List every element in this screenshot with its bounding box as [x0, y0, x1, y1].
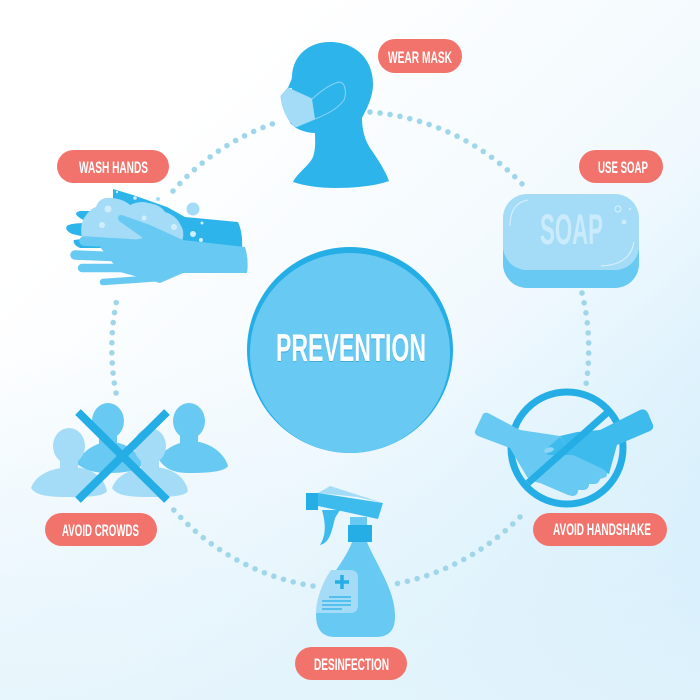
label: wear mask: WEAR MASK: [388, 48, 452, 67]
label: wash hands: [57, 150, 169, 183]
soap lettering: SOAP: [540, 206, 603, 254]
bubbles: [99, 191, 204, 242]
center circle: prevention: [247, 247, 453, 453]
icon: crowd crossed out: [31, 403, 228, 500]
thumb: [545, 437, 573, 455]
back right person: [158, 403, 228, 473]
label: desinfection: DESINFECTION: [314, 655, 389, 674]
label: wash hands: WASH HANDS: [79, 158, 148, 177]
icon: no handshake: [475, 392, 653, 504]
cross: [78, 412, 167, 500]
icon: washing hands: [66, 189, 248, 283]
label: avoid crowds: [45, 513, 157, 546]
right arm: [560, 409, 653, 474]
label: use soap: [579, 150, 663, 183]
left arm and fingers: [475, 413, 607, 496]
label: wear mask: [378, 39, 462, 73]
icon: head with mask: [281, 42, 389, 188]
slash: [528, 413, 607, 483]
front hand: [75, 215, 248, 283]
label: desinfection: [295, 647, 407, 680]
back hand: [66, 189, 242, 248]
front left person: [31, 428, 107, 497]
back middle person: [76, 403, 143, 473]
foam: [81, 198, 183, 244]
label: use soap: USE SOAP: [598, 158, 648, 177]
front middle person: [112, 428, 188, 497]
bottle label: [316, 570, 358, 613]
label: avoid crowds: AVOID CROWDS: [62, 521, 139, 540]
dotted ring connecting the icons: [112, 112, 589, 586]
label: avoid handshake: [533, 513, 667, 546]
icon: spray bottle: [306, 486, 395, 637]
mask: [281, 82, 345, 127]
icon: soap bar: [503, 194, 639, 288]
center heading: PREVENTION: [276, 327, 426, 370]
